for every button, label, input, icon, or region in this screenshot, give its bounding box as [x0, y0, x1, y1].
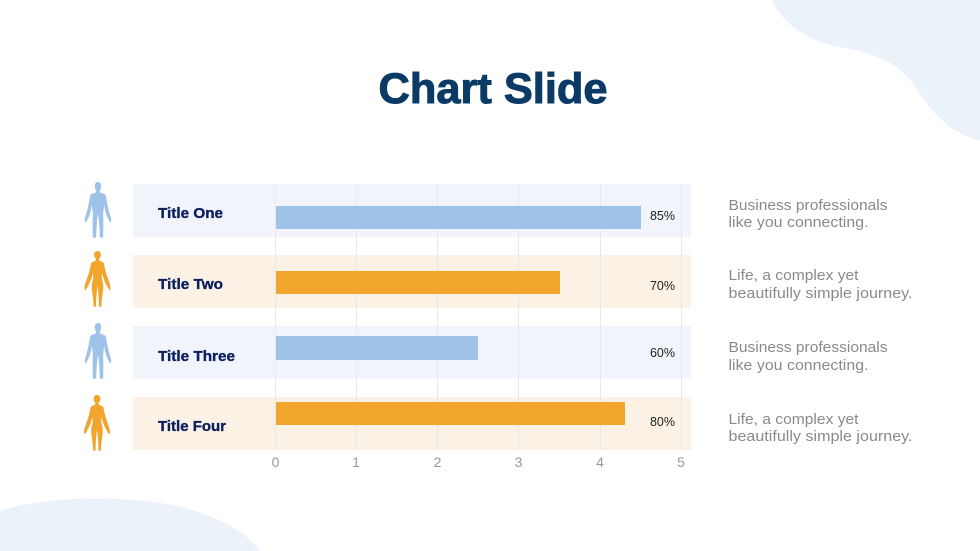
- row label: Title Four: Title Four: [158, 418, 226, 435]
- row band: Title Four: [133, 397, 691, 450]
- bar chart: [272, 184, 685, 470]
- title: Chart Slide: [378, 65, 608, 113]
- decorative blob: top right: [772, 0, 980, 141]
- row label: Title Three: Title Three: [158, 348, 235, 365]
- description: row one: Business professionals: [728, 197, 888, 214]
- axis labels: 2: [434, 454, 442, 470]
- decorative blob: bottom left: [0, 499, 260, 551]
- value: 85%: 85%: [650, 209, 675, 223]
- description: row four: [728, 411, 912, 445]
- row band: Title Three: [133, 326, 691, 379]
- description: row three: [728, 339, 888, 374]
- description: row two: beautifully simple journey.: [728, 285, 912, 302]
- axis labels: 1: [352, 454, 360, 470]
- icon: orange female figure two: [84, 251, 111, 307]
- icon: orange female figure four: [84, 395, 110, 451]
- description: row two: Life, a complex yet: [728, 267, 859, 284]
- axis labels: 0: [272, 454, 280, 470]
- description: row three: like you connecting.: [728, 357, 868, 374]
- bar: Title One: [276, 206, 641, 229]
- bar: Title Three: [276, 336, 478, 360]
- description: row three: Business professionals: [728, 339, 888, 356]
- icon: blue male figure three: [85, 323, 111, 379]
- icon: blue male figure one: [85, 182, 111, 238]
- value: 70%: 70%: [650, 279, 675, 293]
- row label: Title One: Title One: [158, 205, 223, 222]
- description: row one: like you connecting.: [728, 214, 868, 231]
- bar: Title Four: [276, 402, 625, 425]
- description: row two: [728, 267, 912, 302]
- value: 80%: 80%: [650, 415, 675, 429]
- bar: Title Two: [276, 271, 560, 294]
- row label: Title Two: Title Two: [158, 276, 223, 293]
- description: row four: beautifully simple journey.: [728, 428, 912, 445]
- axis labels: [272, 454, 685, 470]
- row band: Title Two: [133, 255, 691, 308]
- value: 60%: 60%: [650, 346, 675, 360]
- axis labels: 3: [515, 454, 523, 470]
- description: row four: Life, a complex yet: [728, 411, 859, 428]
- axis labels: 4: [596, 454, 604, 470]
- axis labels: 5: [677, 454, 685, 470]
- row band: Title One: [133, 184, 691, 237]
- description: row one: [728, 197, 888, 231]
